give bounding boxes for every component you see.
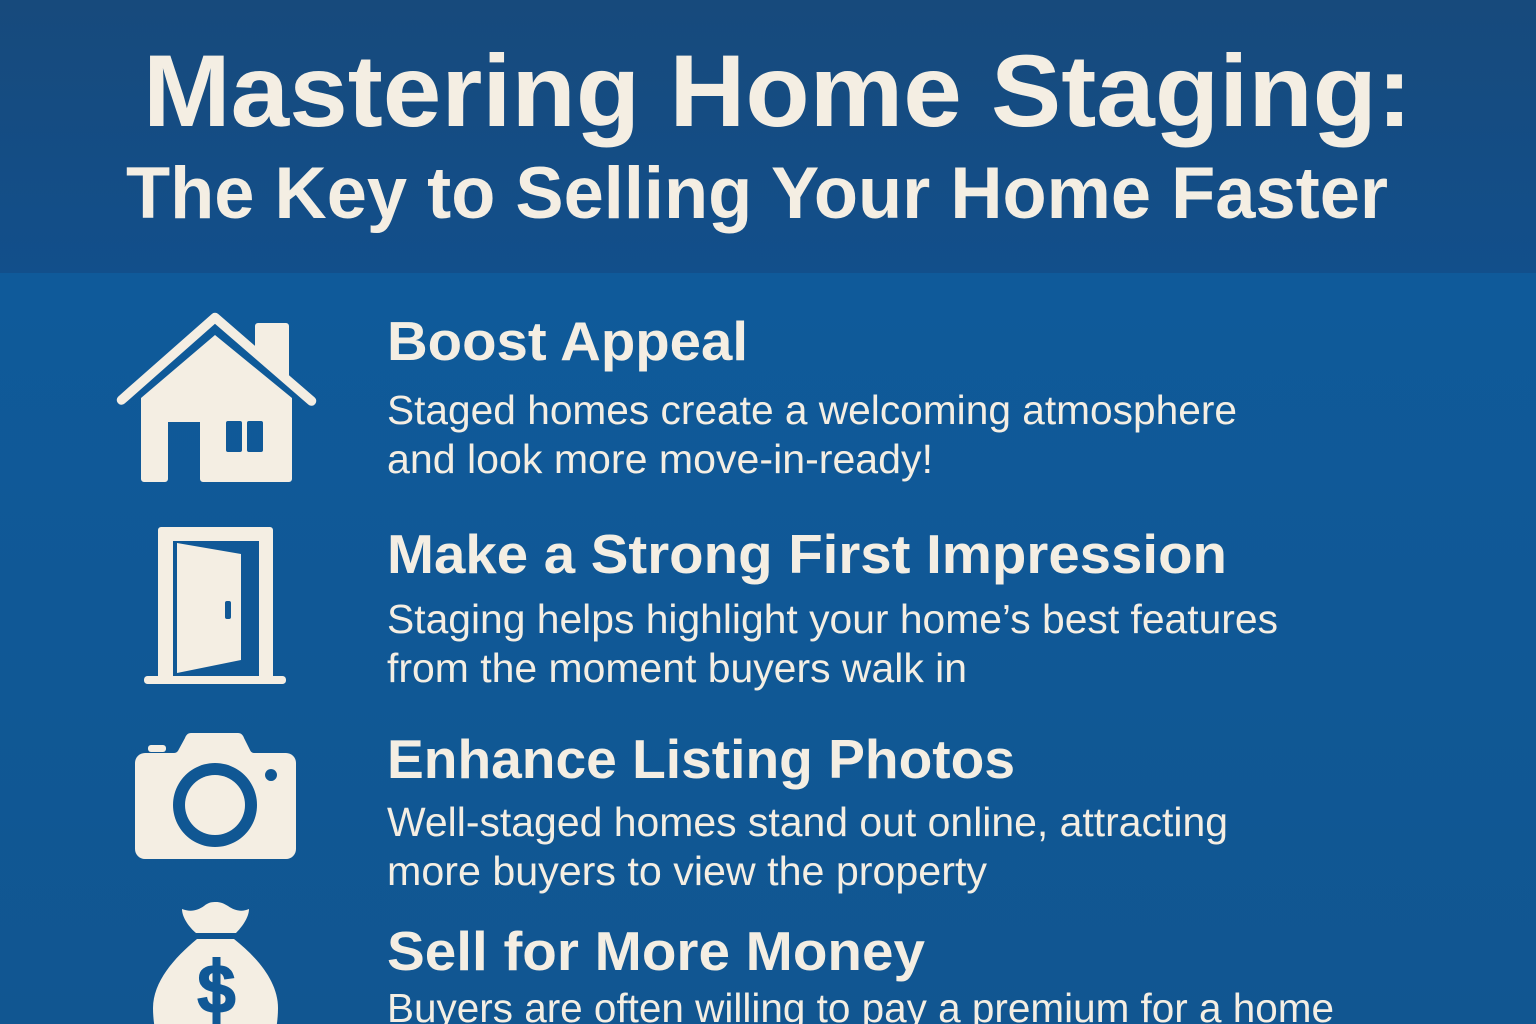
title banner <box>0 0 1536 273</box>
icon: house <box>122 318 312 482</box>
text: listing photos description: Well-staged homes stand out online, attracting <box>387 799 1228 845</box>
title: Mastering Home Staging: <box>143 34 1412 148</box>
heading: first impression: Make a Strong First Impression <box>387 523 1227 585</box>
icon: money bag <box>153 902 278 1024</box>
text: listing photos description <box>387 799 1228 894</box>
text: boost appeal description <box>387 387 1237 482</box>
text: boost appeal description: and look more move-in-ready! <box>387 436 933 482</box>
heading: listing photos: Enhance Listing Photos <box>387 728 1015 790</box>
icon: camera <box>135 733 296 859</box>
heading: sell for more money: Sell for More Money <box>387 920 925 982</box>
text: first impression description: Staging helps highlight your home’s best features <box>387 596 1278 642</box>
icon: open door <box>144 527 286 684</box>
heading: boost appeal: Boost Appeal <box>387 310 748 372</box>
subtitle: The Key to Selling Your Home Faster <box>126 153 1388 234</box>
text: boost appeal description: Staged homes create a welcoming atmosphere <box>387 387 1237 433</box>
text: first impression description: from the moment buyers walk in <box>387 645 967 691</box>
text: listing photos description: more buyers to view the property <box>387 848 987 894</box>
text: first impression description <box>387 596 1278 691</box>
